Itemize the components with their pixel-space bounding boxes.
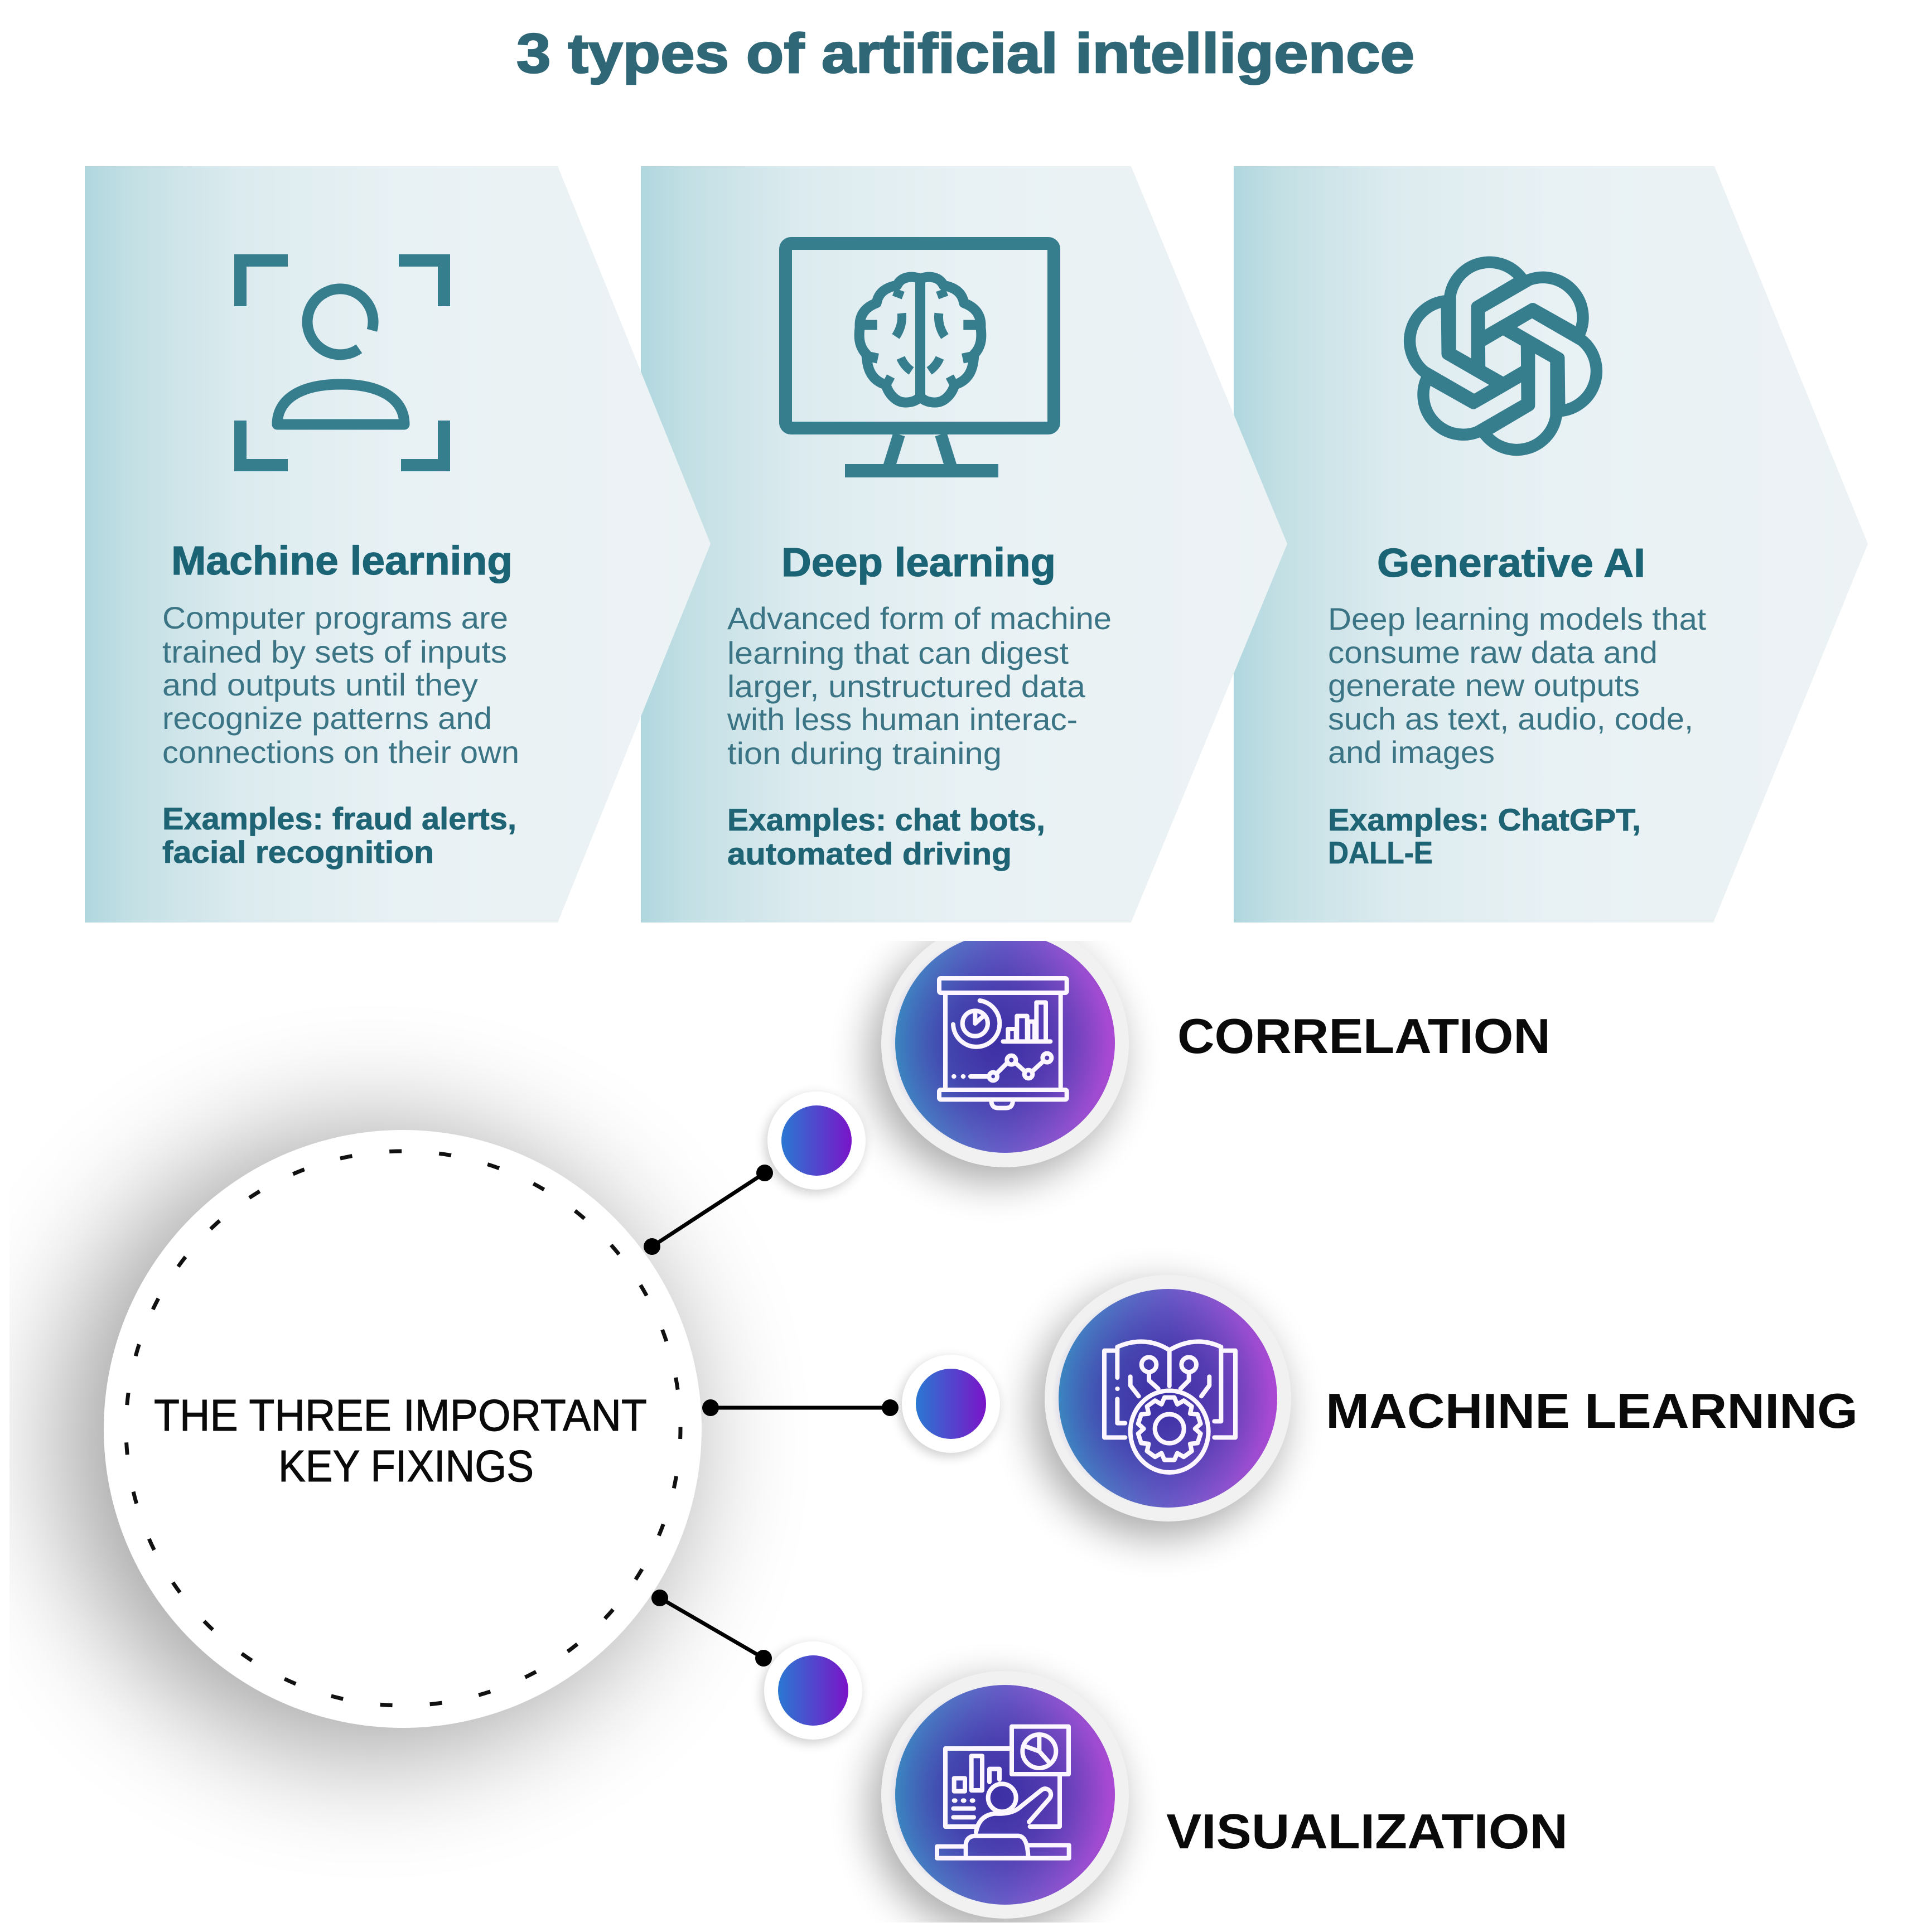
icon: face recognition <box>240 260 444 465</box>
description: Generative AI: and images <box>1328 735 1495 770</box>
description: Machine learning: trained by sets of inputs <box>162 634 507 669</box>
examples: Generative AI <box>1328 802 1641 870</box>
central circle text: THE THREE IMPORTANT <box>154 1390 647 1440</box>
diagram: three important key fixings <box>60 920 1291 1932</box>
description: Deep learning: with less human interac- <box>727 702 1078 737</box>
icon badge: visualization <box>870 1671 1129 1932</box>
icon badge: correlation <box>870 920 1129 1183</box>
description: Generative AI <box>1328 601 1706 770</box>
description: Deep learning: larger, unstructured data <box>727 669 1086 704</box>
description: Machine learning <box>162 600 519 770</box>
description: Deep learning: Advanced form of machine <box>727 601 1112 636</box>
description: Machine learning: and outputs until they <box>162 667 478 702</box>
examples: Deep learning <box>727 802 1045 871</box>
icon: book with gear and circuit <box>1104 1341 1235 1472</box>
examples: Machine learning: facial recognition <box>162 834 434 870</box>
icon: monitor with brain <box>785 243 1054 477</box>
description: Deep learning: learning that can digest <box>727 635 1069 670</box>
examples: Generative AI: Examples: ChatGPT, <box>1328 802 1641 837</box>
panel: machine learning <box>85 166 711 922</box>
examples: Machine learning: Examples: fraud alerts, <box>162 801 516 836</box>
connector: correlation <box>644 1165 773 1255</box>
central circle with dashed ring <box>60 1129 702 1754</box>
icon: presentation screen with charts <box>939 978 1067 1108</box>
icon: presenter with charts <box>937 1727 1069 1858</box>
description: Machine learning: connections on their own <box>162 735 519 770</box>
description: Generative AI: consume raw data and <box>1328 635 1658 670</box>
description: Generative AI: such as text, audio, code, <box>1328 701 1693 736</box>
connector: visualization <box>651 1590 772 1667</box>
node: visualization <box>762 1641 862 1743</box>
description: Generative AI: generate new outputs <box>1328 668 1640 703</box>
central circle text <box>154 1399 646 1482</box>
node: machine learning <box>900 1355 1000 1456</box>
heading: Deep learning: Deep learning <box>781 540 1056 585</box>
description: Deep learning: tion during training <box>727 736 1002 771</box>
icon badge: machine learning <box>1032 1275 1291 1538</box>
panel: generative AI <box>1234 166 1868 922</box>
description: Machine learning: Computer programs are <box>162 600 508 635</box>
description: Machine learning: recognize patterns and <box>162 701 492 736</box>
label: correlation: CORRELATION <box>1177 1008 1551 1064</box>
description: Generative AI: Deep learning models that <box>1328 601 1706 636</box>
panel: deep learning <box>641 166 1287 922</box>
label: machine learning: MACHINE LEARNING <box>1326 1383 1858 1438</box>
examples: Generative AI: DALL-E <box>1328 835 1433 870</box>
node: correlation <box>765 1091 866 1193</box>
examples: Deep learning: automated driving <box>727 836 1012 871</box>
heading: Machine learning: Machine learning <box>171 539 513 583</box>
examples: Deep learning: Examples: chat bots, <box>727 802 1045 837</box>
examples: Machine learning <box>162 801 516 870</box>
connector: machine learning <box>702 1399 899 1416</box>
heading: Generative AI: Generative AI <box>1377 541 1645 586</box>
label: visualization: VISUALIZATION <box>1166 1804 1568 1859</box>
icon: interlaced knot <box>1395 262 1611 450</box>
description: Deep learning <box>727 601 1112 771</box>
title: 3 types of artificial intelligence <box>516 22 1414 85</box>
central circle text: KEY FIXINGS <box>278 1441 534 1491</box>
